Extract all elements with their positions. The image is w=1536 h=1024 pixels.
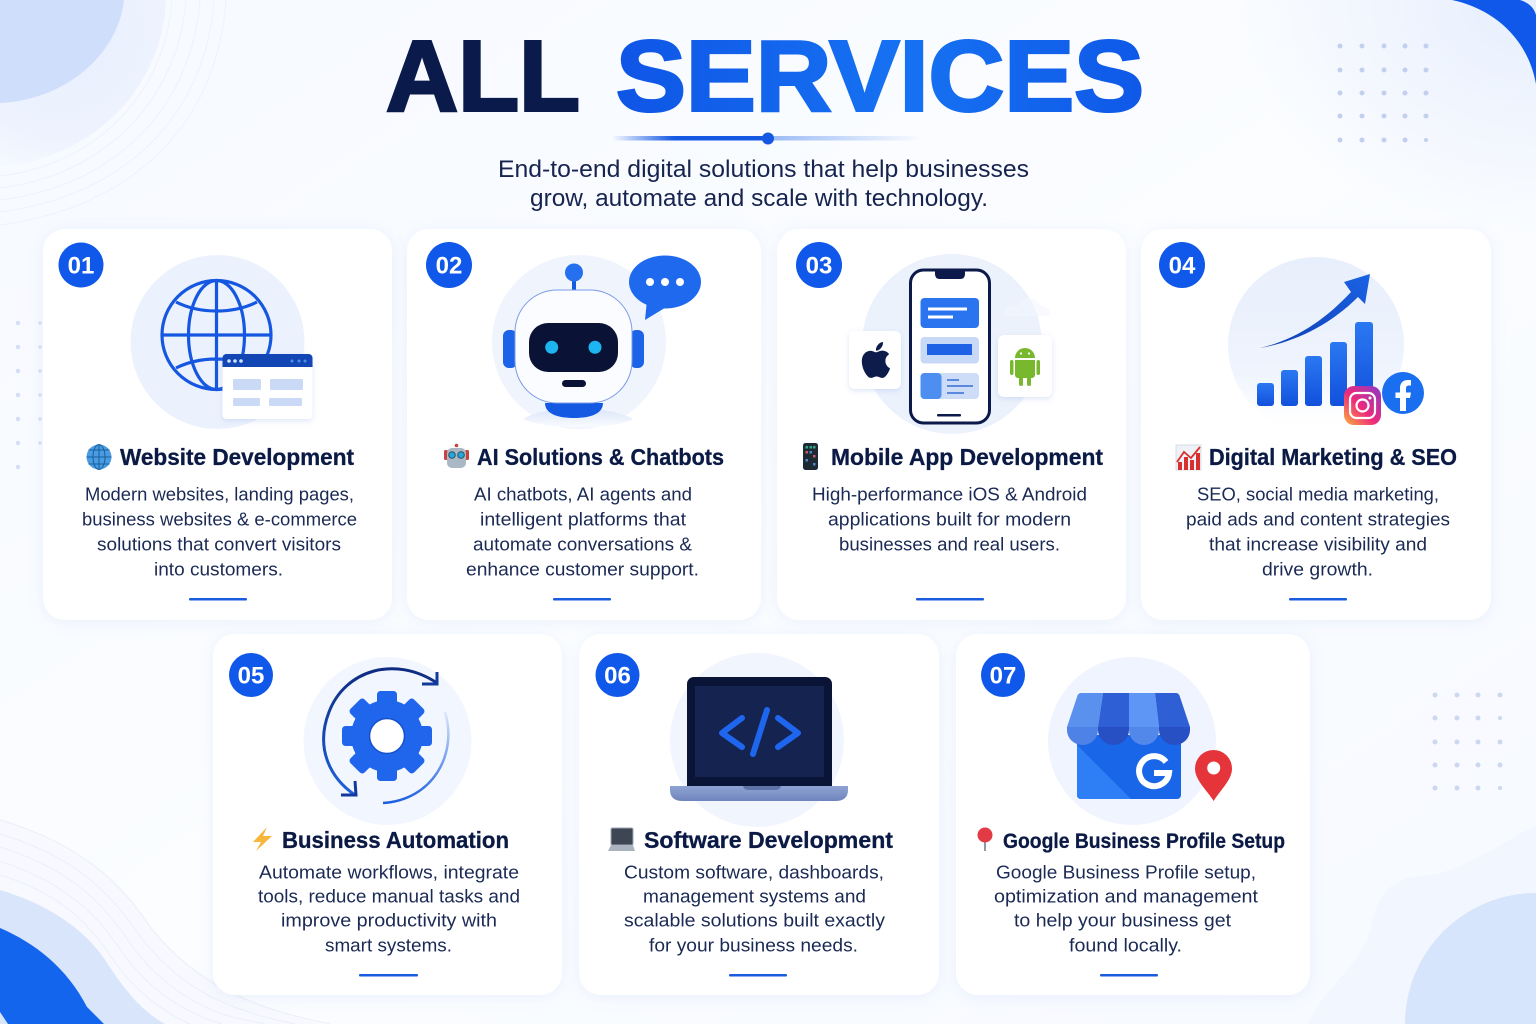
badge 04: 04 xyxy=(1169,252,1196,280)
description: into customers. xyxy=(154,560,283,580)
badge 07 xyxy=(981,653,1025,697)
dot grid left xyxy=(16,321,42,469)
description: enhance customer support. xyxy=(466,560,699,580)
description: that increase visibility and xyxy=(1209,534,1427,554)
badge 05: 05 xyxy=(238,662,264,690)
description: High-performance iOS & Android xyxy=(812,484,1087,504)
title: SERVICES xyxy=(616,20,1144,132)
title divider xyxy=(612,132,922,144)
badge 06: 06 xyxy=(604,662,631,690)
icon: phone with os logos xyxy=(849,254,1052,434)
badge 03 xyxy=(796,242,842,288)
panel: ai solutions xyxy=(407,229,761,620)
description: solutions that convert visitors xyxy=(97,534,341,554)
icon: robot with speech bubble xyxy=(492,255,701,429)
description xyxy=(1186,484,1450,580)
description: improve productivity with xyxy=(281,910,497,930)
description: Automate workflows, integrate xyxy=(259,862,519,882)
icon: growth chart with social logos xyxy=(1228,257,1424,433)
description: paid ads and content strategies xyxy=(1186,510,1450,530)
description xyxy=(624,862,885,956)
icon: laptop with code xyxy=(670,653,848,827)
description: businesses and real users. xyxy=(839,534,1060,554)
badge 07: 07 xyxy=(990,662,1016,690)
panel: google business profile xyxy=(956,634,1310,995)
description: to help your business get xyxy=(1014,910,1231,930)
heading with phone emoji: Mobile App Development xyxy=(831,444,1103,470)
icon: google storefront with map pin xyxy=(1048,657,1232,825)
heading with laptop emoji: Software Development xyxy=(644,827,893,853)
heading with robot emoji: AI Solutions & Chatbots xyxy=(477,444,724,470)
description: applications built for modern xyxy=(828,510,1071,530)
badge 04 xyxy=(1159,242,1205,288)
description: intelligent platforms that xyxy=(480,510,686,530)
badge 02: 02 xyxy=(436,252,462,280)
subtitle: End-to-end digital solutions that help businesses xyxy=(498,156,1029,183)
icon: globe with browser window xyxy=(130,255,312,429)
description xyxy=(258,862,520,956)
panel: mobile app xyxy=(777,229,1126,620)
panel: website development xyxy=(43,229,392,620)
description: drive growth. xyxy=(1262,560,1373,580)
description xyxy=(812,484,1087,554)
heading with lightning emoji: Business Automation xyxy=(282,827,509,853)
description: for your business needs. xyxy=(649,936,858,956)
description: business websites & e-commerce xyxy=(82,510,357,530)
title: ALL xyxy=(386,20,580,132)
panel: business automation xyxy=(213,634,562,995)
panel: software development xyxy=(579,634,939,995)
description: SEO, social media marketing, xyxy=(1197,484,1439,504)
description: AI chatbots, AI agents and xyxy=(474,484,692,504)
heading with chart emoji: Digital Marketing & SEO xyxy=(1209,444,1457,470)
description: tools, reduce manual tasks and xyxy=(258,886,520,906)
description xyxy=(994,862,1258,956)
badge 06 xyxy=(596,653,640,697)
dot grid top right xyxy=(1338,44,1428,142)
icon: gear with cycle arrows xyxy=(304,657,472,825)
description: scalable solutions built exactly xyxy=(624,910,885,930)
badge 02 xyxy=(426,242,472,288)
title xyxy=(386,20,1144,132)
subtitle: grow, automate and scale with technology. xyxy=(530,185,988,212)
heading with pin emoji: Google Business Profile Setup xyxy=(1003,829,1285,853)
description: found locally. xyxy=(1069,936,1182,956)
description: automate conversations & xyxy=(473,534,692,554)
badge 03: 03 xyxy=(806,252,832,280)
heading with globe emoji: Website Development xyxy=(120,444,354,470)
subtitle xyxy=(498,156,1029,212)
description xyxy=(466,484,699,580)
description: management systems and xyxy=(643,886,866,906)
badge 01: 01 xyxy=(68,252,94,280)
description: Google Business Profile setup, xyxy=(996,862,1256,882)
badge 01 xyxy=(58,242,104,288)
description xyxy=(82,484,357,580)
description: optimization and management xyxy=(994,886,1258,906)
description: Modern websites, landing pages, xyxy=(85,484,354,504)
description: Custom software, dashboards, xyxy=(624,862,884,882)
badge 05 xyxy=(229,653,273,697)
description: smart systems. xyxy=(325,936,452,956)
panel: digital marketing xyxy=(1141,229,1491,620)
dot grid right xyxy=(1432,692,1502,790)
